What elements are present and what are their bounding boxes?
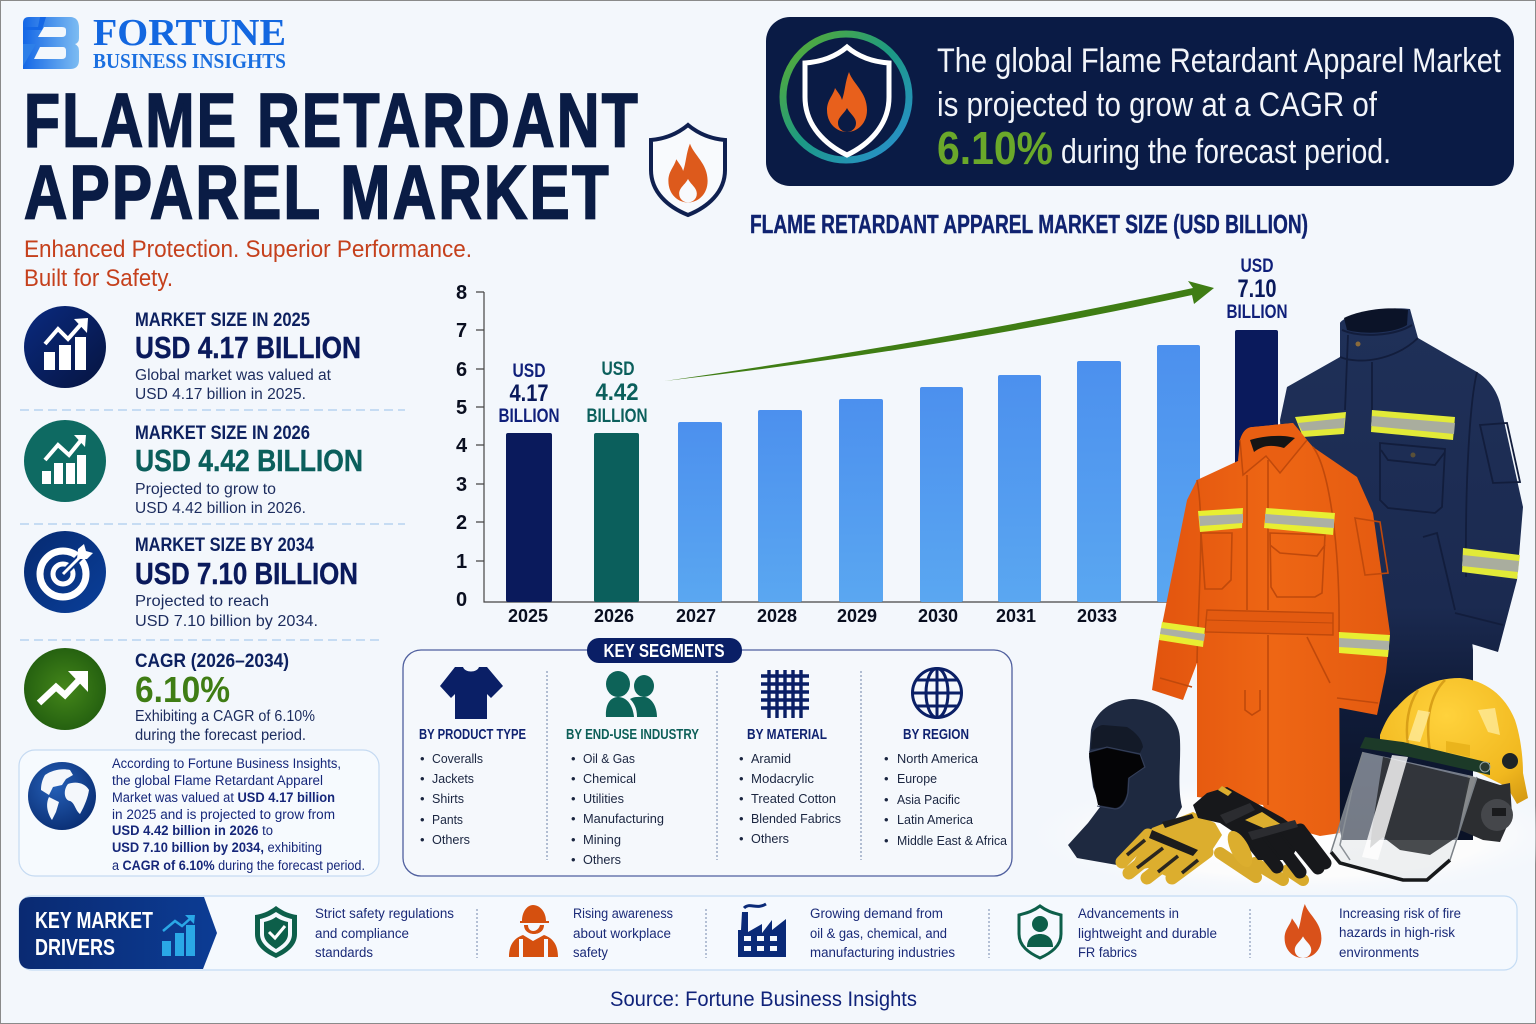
segment: by end-use industry: •: [571, 811, 576, 826]
driver: safety regulations: [255, 906, 454, 960]
segment: by product type: •: [420, 791, 425, 806]
panel: key segments: [403, 638, 1012, 876]
x axis labels: 2026: [594, 606, 634, 626]
x axis labels: 2029: [837, 606, 877, 626]
segment: by product type: [419, 667, 526, 847]
stat: market size 2034: USD 7.10 BILLION: [135, 556, 358, 591]
driver: lightweight fabrics: lightweight and durable: [1078, 926, 1217, 941]
y axis: 6: [456, 359, 467, 381]
driver: fire hazards: [1285, 904, 1461, 960]
value label 2026: 4.42: [596, 379, 638, 406]
summary paragraph: USD 7.10 billion by 2034, exhibiting: [112, 840, 322, 855]
segment: by end-use industry: •: [571, 771, 576, 786]
segment: by end-use industry: Utilities: [583, 791, 624, 806]
segment: by material: BY MATERIAL: [747, 726, 827, 743]
segment: by region: Asia Pacific: [897, 792, 960, 807]
icon: flame: [1285, 904, 1321, 958]
title: FLAME RETARDANT: [24, 78, 640, 164]
lower yellow fingers: [1220, 853, 1303, 880]
segment: by material: Modacrylic: [751, 771, 815, 786]
stat: market size 2034: USD 7.10 billion by 2034.: [135, 613, 318, 630]
source: Source: Fortune Business Insights: [610, 988, 917, 1011]
panel: CAGR callout: [766, 17, 1514, 186]
driver: workplace awareness: Rising awareness: [573, 906, 673, 921]
segment: by region: •: [884, 792, 889, 807]
y axis: 3: [456, 474, 467, 496]
value label 2034: BILLION: [1226, 302, 1288, 323]
segment: by region: Latin America: [897, 812, 974, 827]
stat: market size 2025: [24, 306, 361, 403]
value label 2025: BILLION: [498, 406, 560, 427]
navy jacket: [1280, 308, 1523, 840]
segment: by product type: Others: [432, 832, 470, 847]
x axis labels: 2031: [996, 606, 1036, 626]
value label 2034: 7.10: [1238, 275, 1276, 303]
hard hat with face shield: [1331, 678, 1528, 880]
segment: by end-use industry: •: [571, 791, 576, 806]
tagline: Enhanced Protection. Superior Performance.: [24, 236, 472, 263]
x axis labels: 2027: [676, 606, 716, 626]
icon: globe: [28, 762, 96, 830]
driver: safety regulations: and compliance: [315, 926, 409, 941]
summary paragraph: Market was valued at USD 4.17 billion: [112, 790, 335, 805]
icon: fabric weave: [761, 670, 809, 718]
segment: by end-use industry: Others: [583, 852, 621, 867]
logo: Fortune Business Insights: BUSINESS INSIGHTS: [93, 49, 286, 73]
stat: CAGR: CAGR (2026–2034): [135, 651, 289, 672]
icon: factory: [738, 904, 786, 957]
x axis labels: 2028: [757, 606, 797, 626]
key segments pill heading: KEY SEGMENTS: [604, 641, 724, 661]
tagline: Built for Safety.: [24, 265, 173, 292]
helmet shell: [1380, 678, 1528, 804]
icon: check shield: [255, 906, 297, 958]
value label 2026: [586, 359, 648, 427]
tagline: [24, 236, 472, 292]
segment: by region: •: [884, 771, 889, 786]
segment: by end-use industry: Oil & Gas: [583, 751, 635, 766]
driver: lightweight fabrics: Advancements in: [1078, 906, 1179, 921]
arrow: growth trend: [665, 281, 1214, 381]
logo: Fortune Business Insights: [23, 12, 286, 73]
stat: market size 2025: MARKET SIZE IN 2025: [135, 310, 310, 331]
value label 2026: BILLION: [586, 406, 648, 427]
icon: ring shield with flame: [783, 34, 909, 160]
segment: by product type: BY PRODUCT TYPE: [419, 726, 526, 743]
segment: by material: •: [739, 791, 744, 806]
segment: by region: North America: [897, 751, 979, 766]
driver: industry demand: Growing demand from: [810, 906, 943, 921]
value label 2025: USD: [512, 361, 546, 382]
driver: industry demand: manufacturing industries: [810, 945, 955, 960]
driver: safety regulations: standards: [315, 945, 373, 960]
segment: by end-use industry: •: [571, 751, 576, 766]
stat: CAGR: during the forecast period.: [135, 727, 306, 744]
y axis: 0: [456, 589, 467, 611]
segment: by end-use industry: Manufacturing: [583, 811, 664, 826]
x axis labels: [508, 606, 1117, 626]
stat: market size 2026: USD 4.42 billion in 2026.: [135, 500, 306, 517]
driver: industry demand: oil & gas, chemical, and: [810, 926, 947, 941]
segment: by product type: •: [420, 812, 425, 827]
segment: by product type: •: [420, 771, 425, 786]
value label 2025: [498, 361, 560, 427]
segment: by region: •: [884, 751, 889, 766]
panel: key market drivers: [19, 896, 1517, 970]
driver: industry demand: [738, 904, 955, 960]
stat: market size 2026: [24, 420, 363, 517]
segment: by product type: Jackets: [432, 771, 474, 786]
x axis labels: 2025: [508, 606, 548, 626]
callout text: [937, 42, 1501, 174]
segment: by end-use industry: Chemical: [583, 771, 636, 786]
title: [24, 78, 640, 236]
driver: lightweight fabrics: [1019, 906, 1217, 960]
key market drivers badge: KEY MARKET: [35, 907, 153, 933]
key segments pill heading: [587, 638, 742, 663]
visor glass: [1331, 752, 1477, 880]
segment: by product type: Shirts: [432, 791, 464, 806]
stat: market size 2034: Projected to reach: [135, 593, 269, 610]
visor band: [1360, 737, 1490, 775]
value label 2026: USD: [602, 359, 634, 380]
icon: shirt: [440, 667, 503, 719]
segment: by end-use industry: •: [571, 832, 576, 847]
orange coverall: [1152, 423, 1390, 836]
summary paragraph: USD 4.42 billion in 2026 to: [112, 823, 273, 838]
summary paragraph: a CAGR of 6.10% during the forecast period.: [112, 858, 365, 873]
driver: lightweight fabrics: FR fabrics: [1078, 945, 1137, 960]
y axis: 2: [456, 512, 467, 534]
stat: market size 2026: USD 4.42 BILLION: [135, 443, 363, 478]
icon: worker: [509, 905, 558, 957]
chart heading: FLAME RETARDANT APPAREL MARKET SIZE (USD BILLION): [750, 209, 1308, 239]
segment: by material: •: [739, 771, 744, 786]
y axis: 1: [456, 551, 467, 573]
side ratchet: [1460, 775, 1512, 842]
callout text: 6.10%: [937, 122, 1053, 174]
y axis: 7: [456, 320, 467, 342]
segment: by end-use industry: [566, 671, 699, 867]
segment: by region: Middle East & Africa: [897, 833, 1008, 848]
y axis: 8: [456, 282, 467, 304]
title: APPAREL MARKET: [24, 150, 611, 236]
value label 2025: 4.17: [510, 380, 548, 407]
segment: by region: BY REGION: [903, 726, 969, 743]
callout text: is projected to grow at a CAGR of: [937, 86, 1377, 124]
segment: by region: Europe: [897, 771, 937, 786]
y axis: 4: [456, 435, 468, 457]
icon: shield with flame: [651, 125, 725, 215]
bars: [506, 330, 1278, 602]
summary paragraph: [112, 756, 365, 873]
segment: by material: •: [739, 811, 744, 826]
segment: by product type: Coveralls: [432, 751, 483, 766]
left yellow glove: [1128, 812, 1222, 880]
panel: summary text box: [19, 750, 379, 876]
y axis: 5: [456, 397, 467, 419]
panel: market stats: [20, 306, 405, 744]
balaclava: [1068, 699, 1182, 865]
segment: by material: Treated Cotton: [751, 791, 836, 806]
driver: fire hazards: hazards in high-risk: [1339, 925, 1455, 940]
stat: market size 2025: USD 4.17 billion in 2025.: [135, 386, 306, 403]
coverall reflective strips: [1159, 508, 1390, 657]
segment: by end-use industry: •: [571, 852, 576, 867]
jacket reflective strips: [1295, 410, 1520, 579]
stat: market size 2025: Global market was valued at: [135, 367, 332, 384]
icon: person shield: [1019, 906, 1061, 958]
stat: CAGR: [24, 648, 315, 744]
value label 2034: USD: [1240, 256, 1274, 277]
icon: people: [606, 671, 657, 717]
summary paragraph: in 2025 and is projected to grow from: [112, 807, 335, 822]
stat: market size 2034: [24, 531, 358, 630]
segment: by product type: •: [420, 751, 425, 766]
stat: CAGR: Exhibiting a CAGR of 6.10%: [135, 708, 315, 725]
stat: market size 2025: USD 4.17 BILLION: [135, 330, 361, 365]
bar chart: [456, 256, 1288, 626]
y axis: [456, 282, 1190, 611]
right black glove: [1193, 787, 1305, 860]
stat: CAGR: 6.10%: [135, 669, 230, 710]
segment: by material: [739, 670, 841, 846]
segment: by material: Aramid: [751, 751, 791, 766]
driver: workplace awareness: safety: [573, 945, 608, 960]
segment: by material: •: [739, 831, 744, 846]
summary paragraph: According to Fortune Business Insights,: [112, 756, 341, 771]
icon: wire globe: [912, 668, 962, 718]
segment: by region: •: [884, 812, 889, 827]
driver: workplace awareness: [509, 905, 673, 960]
protective apparel illustration: [1030, 308, 1536, 895]
segment: by product type: Pants: [432, 812, 463, 827]
x axis labels: 2033: [1077, 606, 1117, 626]
x axis labels: 2030: [918, 606, 958, 626]
segment: by end-use industry: Mining: [583, 832, 621, 847]
key market drivers badge: DRIVERS: [35, 934, 115, 960]
callout text: during the forecast period.: [1061, 133, 1391, 171]
driver: fire hazards: environments: [1339, 945, 1419, 960]
segment: by material: Others: [751, 831, 789, 846]
driver: safety regulations: Strict safety regulations: [315, 906, 454, 921]
stat: market size 2034: MARKET SIZE BY 2034: [135, 535, 314, 556]
segment: by material: •: [739, 751, 744, 766]
stat: market size 2026: MARKET SIZE IN 2026: [135, 423, 310, 444]
key market drivers badge: [19, 897, 217, 969]
segment: by region: •: [884, 833, 889, 848]
segment: by region: [884, 668, 1008, 848]
stat: market size 2026: Projected to grow to: [135, 481, 276, 498]
driver: fire hazards: Increasing risk of fire: [1339, 906, 1461, 921]
segment: by product type: •: [420, 832, 425, 847]
logo: Fortune Business Insights: FORTUNE: [93, 12, 286, 54]
gloves: [1122, 786, 1325, 880]
summary paragraph: the global Flame Retardant Apparel: [112, 773, 323, 788]
driver: workplace awareness: about workplace: [573, 926, 671, 941]
value label 2034: [1226, 256, 1288, 323]
segment: by material: Blended Fabrics: [751, 811, 841, 826]
segment: by end-use industry: BY END-USE INDUSTRY: [566, 726, 699, 743]
